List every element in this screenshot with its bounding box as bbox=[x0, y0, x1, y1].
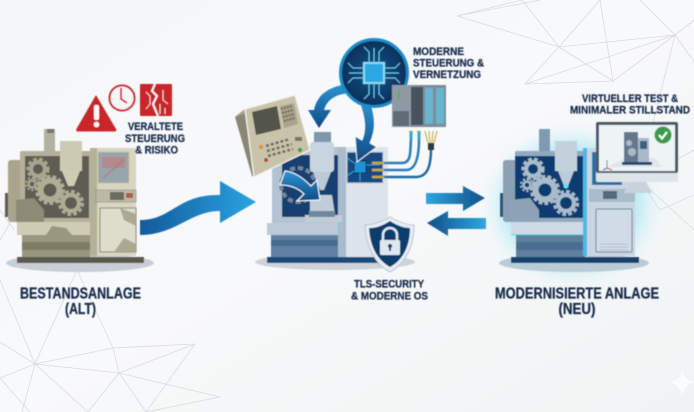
label: veraltete steuerung: STEUERUNG bbox=[125, 133, 185, 145]
label: virtueller test bbox=[570, 93, 690, 116]
glow bbox=[486, 129, 658, 281]
icon: broken red circuit bbox=[140, 84, 172, 116]
gears: new bbox=[521, 159, 578, 214]
arrow: circle to spindle bbox=[308, 84, 350, 128]
heading: Modernisierte Anlage: (NEU) bbox=[558, 301, 596, 318]
label: TLS security bbox=[351, 278, 428, 302]
label: veraltete steuerung bbox=[125, 121, 185, 156]
gear and workpiece bbox=[281, 168, 315, 202]
label: moderne steuerung: STEUERUNG & bbox=[413, 58, 484, 70]
label: TLS security: TLS-SECURITY bbox=[354, 278, 425, 290]
cables bbox=[372, 131, 437, 177]
heading: Bestandsanlage bbox=[20, 286, 141, 318]
arrow: circle to screen bbox=[355, 100, 377, 162]
arrow: exchange left bbox=[427, 211, 486, 236]
label: virtueller test: VIRTUELLER TEST & bbox=[582, 93, 678, 105]
icon: warning triangle bbox=[77, 96, 116, 131]
label: TLS security: & MODERNE OS bbox=[351, 290, 428, 302]
icon: CNC control panel bbox=[235, 95, 310, 177]
label: veraltete steuerung: VERALTETE bbox=[128, 121, 183, 133]
machine: old bbox=[5, 129, 154, 272]
icon: security shield bbox=[365, 217, 414, 272]
label: moderne steuerung: VERNETZUNG bbox=[413, 69, 481, 81]
machine: new bbox=[499, 129, 649, 272]
label: moderne steuerung bbox=[413, 46, 484, 81]
heading: Bestandsanlage: BESTANDSANLAGE bbox=[20, 286, 141, 302]
icon: clock bbox=[110, 86, 134, 110]
icon: PLC unit bbox=[392, 85, 446, 127]
arrow: curved into spindle bbox=[280, 171, 320, 201]
label: moderne steuerung: MODERNE bbox=[413, 46, 464, 58]
chip on screen bbox=[354, 161, 366, 173]
heading: Bestandsanlage: (ALT) bbox=[65, 301, 96, 318]
arrow: exchange right bbox=[426, 186, 485, 211]
heading: Modernisierte Anlage: MODERNISIERTE ANLAGE bbox=[495, 286, 659, 302]
heading: Modernisierte Anlage bbox=[495, 286, 659, 318]
label: veraltete steuerung: & RISIKO bbox=[135, 144, 178, 156]
machine: center bbox=[255, 132, 415, 270]
icon: chip circle bbox=[340, 40, 408, 106]
gears: old bbox=[26, 159, 82, 214]
icon: monitor with virtual test bbox=[596, 122, 678, 193]
sparkle bbox=[670, 370, 694, 396]
arrow: old to center bbox=[140, 181, 256, 235]
